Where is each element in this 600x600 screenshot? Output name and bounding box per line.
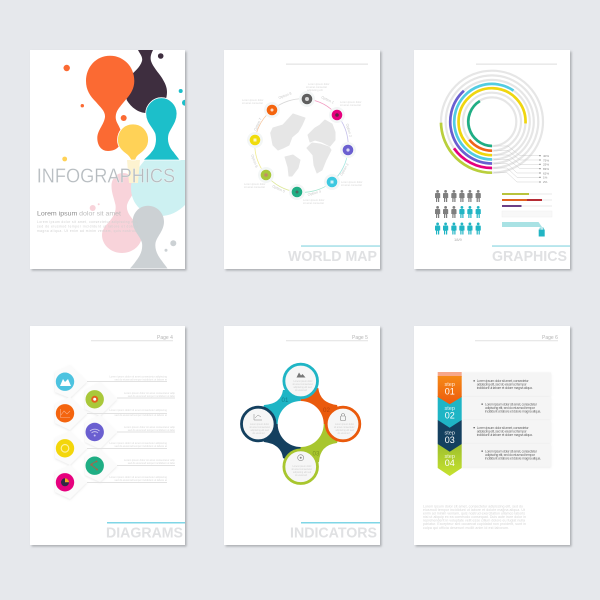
node icons — [254, 97, 350, 194]
percentage labels: 1% — [543, 176, 548, 180]
option labels: Option 3 — [339, 163, 350, 176]
node descriptions: Lorem ipsum dolor — [242, 98, 264, 102]
step 3 text — [474, 426, 533, 437]
node descriptions: sit amet consectet — [244, 185, 265, 189]
node descriptions: sit amet consectet — [341, 183, 362, 187]
step 02 — [444, 406, 455, 420]
icon: pie chart — [56, 473, 74, 491]
step 1 text — [474, 379, 533, 390]
subtitle: Lorem ipsum dolor sit amet — [37, 211, 121, 218]
step 03 — [444, 431, 455, 445]
step 1 text: adipiscing elit, sed do eiusmod tempor — [477, 382, 528, 386]
icon: teal tag — [539, 228, 545, 236]
panel: infographics cover — [30, 50, 188, 269]
title: infographics: INFOGRAPHICS — [37, 166, 175, 188]
option labels: Option 4 — [307, 190, 321, 197]
centre circle — [278, 401, 324, 447]
step 2 text: incididunt ut labore et dolore magna aliqua. — [485, 409, 541, 413]
ring: top — [284, 364, 318, 398]
bottom paragraph: pariatur. Excepteur sint occaecat cupidatat non proident, sunt in — [423, 522, 526, 526]
footer rule — [301, 245, 380, 247]
step 04 — [444, 454, 455, 468]
step 1 text: incididunt ut labore et dolore magna aliqua. — [477, 386, 533, 390]
node descriptions: sit amet consectet — [242, 101, 263, 105]
step 01: 01 — [445, 386, 455, 396]
diagram descriptions: sed do eiusmod tempor incididunt ut labore et — [115, 478, 167, 482]
node descriptions: Lorem ipsum dolor — [303, 198, 325, 202]
ring: bottom: sit amet consectetur — [292, 468, 312, 471]
node descriptions — [242, 82, 363, 205]
node descriptions: sit amet consectet — [303, 201, 324, 205]
step 04: 04 — [445, 458, 455, 468]
step 02: 02 — [445, 410, 455, 420]
ring: left — [241, 407, 275, 441]
percentage labels: 83% — [543, 167, 549, 171]
ring: right: do eiusmod — [338, 433, 350, 435]
step 03: step — [444, 431, 455, 437]
footer rule — [301, 522, 380, 524]
diagram descriptions: Lorem ipsum dolor sit amet consectetur adipiscing — [109, 408, 168, 412]
percentage labels: 2% — [543, 180, 548, 184]
step 4 text: Lorem ipsum dolor sit amet, consectetur — [485, 449, 538, 453]
step 1 text: Lorem ipsum dolor sit amet, consectetur — [477, 379, 530, 383]
node descriptions: sit amet consectet — [340, 103, 361, 107]
diagram descriptions: Lorem ipsum dolor sit amet consectetur adipiscing — [109, 441, 168, 445]
option labels: Option 1 — [321, 95, 335, 105]
diagram descriptions: sed do eiusmod tempor incididunt ut labore et — [115, 444, 167, 448]
diagram descriptions: Lorem ipsum dolor sit amet consectetur adip — [124, 425, 176, 429]
concentric track rings — [441, 71, 543, 173]
option labels: Option 7 — [253, 117, 263, 131]
ring: left: do eiusmod — [252, 433, 265, 435]
node descriptions: adipiscing elit — [307, 88, 323, 92]
diagram descriptions: sed do eiusmod tempor incididunt ut labo — [128, 461, 176, 465]
pictogram caption: 18/9 — [454, 237, 463, 242]
step 4 text: adipiscing elit, sed do eiusmod tempor — [485, 453, 536, 457]
ring: bottom: do eiusmod — [295, 475, 308, 477]
bottom paragraph: enim ad minim veniam, quis nostrud exercitation ullamco laboris — [423, 512, 525, 516]
panel: steps — [414, 326, 570, 545]
leader lines — [494, 146, 540, 182]
ring: top: sit amet consectetur — [292, 383, 313, 386]
step 4 text: incididunt ut labore et dolore magna aliqua. — [485, 456, 541, 460]
step 3 text: adipiscing elit, sed do eiusmod tempor — [477, 429, 528, 433]
ring: left: sit amet consectetur — [250, 426, 270, 429]
heading: diagrams: DIAGRAMS — [106, 524, 183, 542]
diagram descriptions: Lorem ipsum dolor sit amet consectetur adipiscing — [109, 374, 168, 378]
cover paragraph: magna aliqua. Ut enim ad minim veniam, quis nostrud — [37, 229, 136, 233]
option labels — [250, 92, 352, 197]
icon: chart — [56, 404, 74, 422]
step 01: step — [444, 382, 455, 388]
step 4 text — [482, 449, 541, 460]
step ribbon — [438, 372, 462, 476]
label bullets — [540, 155, 541, 182]
step 2 text: Lorem ipsum dolor sit amet, consectetur — [485, 402, 538, 406]
footer rule — [107, 522, 185, 524]
blob artwork — [62, 50, 188, 268]
ring: bottom — [284, 450, 318, 484]
percentage labels: 62% — [543, 171, 549, 175]
icon: target — [86, 390, 104, 408]
cover paragraph: Lorem ipsum dolor sit amet, consectetur adipiscing elit, — [37, 220, 138, 224]
option labels: Option 2 — [345, 123, 352, 137]
bottom paragraph: nisi ut aliquip ex ea commodo consequat. Duis aute irure dolor in — [423, 515, 526, 519]
step 3 text: incididunt ut labore et dolore magna aliqua. — [477, 433, 533, 437]
ring: right: Lorem ipsum dolor — [335, 423, 354, 426]
ring: top: adipiscing elit sed — [294, 386, 312, 389]
icon: wifi — [86, 423, 104, 441]
step 02: step — [444, 406, 455, 412]
hexagon backplates — [55, 365, 117, 499]
diagram descriptions: Lorem ipsum dolor sit amet consectetur adip — [124, 391, 176, 395]
cover paragraph: sed do eiusmod tempor incididunt ut labore et dolore — [37, 224, 138, 228]
option labels: Option 6 — [250, 154, 258, 168]
ring: left: adipiscing elit sed — [250, 429, 269, 432]
page number: Page 4 — [157, 335, 173, 341]
ring: right: sit amet consectetur — [334, 426, 355, 429]
node descriptions: Lorem ipsum dolor — [244, 182, 266, 186]
ring: top: do eiusmod — [295, 390, 308, 392]
bar chart — [502, 193, 552, 217]
people pictogram — [435, 190, 481, 234]
petal connectors — [258, 388, 343, 467]
bottom paragraph — [423, 504, 526, 530]
cover paragraph — [37, 220, 138, 233]
panel: graphics — [414, 50, 570, 269]
step numbers: 03 — [312, 450, 320, 458]
option labels: Option 5 — [272, 184, 286, 194]
step numbers: 02 — [323, 407, 330, 414]
ring: top: Lorem ipsum dolor — [294, 380, 313, 383]
world map silhouette — [271, 114, 335, 176]
ring connector — [255, 99, 348, 192]
step 04: step — [444, 454, 455, 460]
teal callout band — [502, 222, 542, 227]
panel: world map — [224, 50, 380, 269]
node descriptions: Lorem ipsum dolor — [341, 180, 363, 184]
diagram descriptions: sed do eiusmod tempor incididunt ut labore et — [115, 378, 167, 382]
node descriptions: sit amet consectet — [306, 85, 327, 89]
icon: users — [56, 372, 74, 391]
heading: graphics: GRAPHICS — [492, 248, 567, 265]
ring: left: Lorem ipsum dolor — [250, 423, 269, 426]
step 03: 03 — [445, 435, 455, 445]
diagram descriptions: sed do eiusmod tempor incididunt ut labo — [128, 394, 176, 398]
percentage labels: 25% — [543, 163, 549, 167]
node descriptions: Lorem ipsum dolor — [340, 100, 362, 104]
diagram descriptions: sed do eiusmod tempor incididunt ut labo — [128, 428, 176, 432]
diagram descriptions: sed do eiusmod tempor incididunt ut labore et — [115, 413, 167, 417]
panel: indicators — [224, 326, 380, 545]
step numbers — [282, 397, 330, 458]
bottom paragraph: reprehenderit in voluptate velit esse cillum dolore eu fugiat nulla — [423, 518, 525, 522]
page number: Page 5 — [352, 335, 368, 341]
node halos — [247, 91, 356, 200]
connector rules — [87, 381, 175, 483]
option labels: Option 8 — [278, 92, 292, 100]
bottom paragraph: culpa qui officia deserunt mollit anim id est laborum. — [423, 526, 509, 530]
diagram descriptions: Lorem ipsum dolor sit amet consectetur adip — [124, 458, 176, 462]
coloured progress arcs — [441, 84, 526, 173]
percentage labels: 40% — [543, 154, 549, 158]
footer rule — [492, 245, 570, 247]
node descriptions: Lorem ipsum dolor — [308, 82, 330, 86]
heading: world map: WORLD MAP — [288, 248, 377, 265]
step 2 text — [482, 402, 541, 413]
page number: Page 6 — [542, 335, 558, 341]
step numbers: 01 — [282, 397, 289, 404]
icon: share — [86, 456, 104, 475]
diagram descriptions: Lorem ipsum dolor sit amet consectetur adipiscing — [109, 475, 168, 479]
ring: right — [326, 407, 360, 441]
step cards — [462, 372, 551, 467]
heading: indicators: INDICATORS — [290, 524, 377, 542]
ring: bottom: Lorem ipsum dolor — [292, 465, 312, 468]
diagram descriptions — [109, 374, 176, 482]
bottom paragraph: eiusmod tempor incididunt ut labore et dolore magna aliqua. Ut — [423, 508, 525, 512]
step 01 — [444, 382, 455, 396]
step 3 text: Lorem ipsum dolor sit amet, consectetur — [477, 426, 530, 430]
ring nodes — [250, 94, 353, 197]
ring: bottom: adipiscing elit sed — [293, 471, 312, 474]
panel: diagrams — [30, 326, 185, 545]
icon: gear — [56, 439, 74, 457]
bottom paragraph: Lorem ipsum dolor sit amet, consectetur adipiscing elit, sed do — [423, 504, 523, 508]
percentage labels — [543, 154, 549, 184]
step 2 text: adipiscing elit, sed do eiusmod tempor — [485, 406, 536, 410]
ring: right: adipiscing elit sed — [336, 429, 354, 432]
percentage labels: 75% — [543, 158, 549, 162]
